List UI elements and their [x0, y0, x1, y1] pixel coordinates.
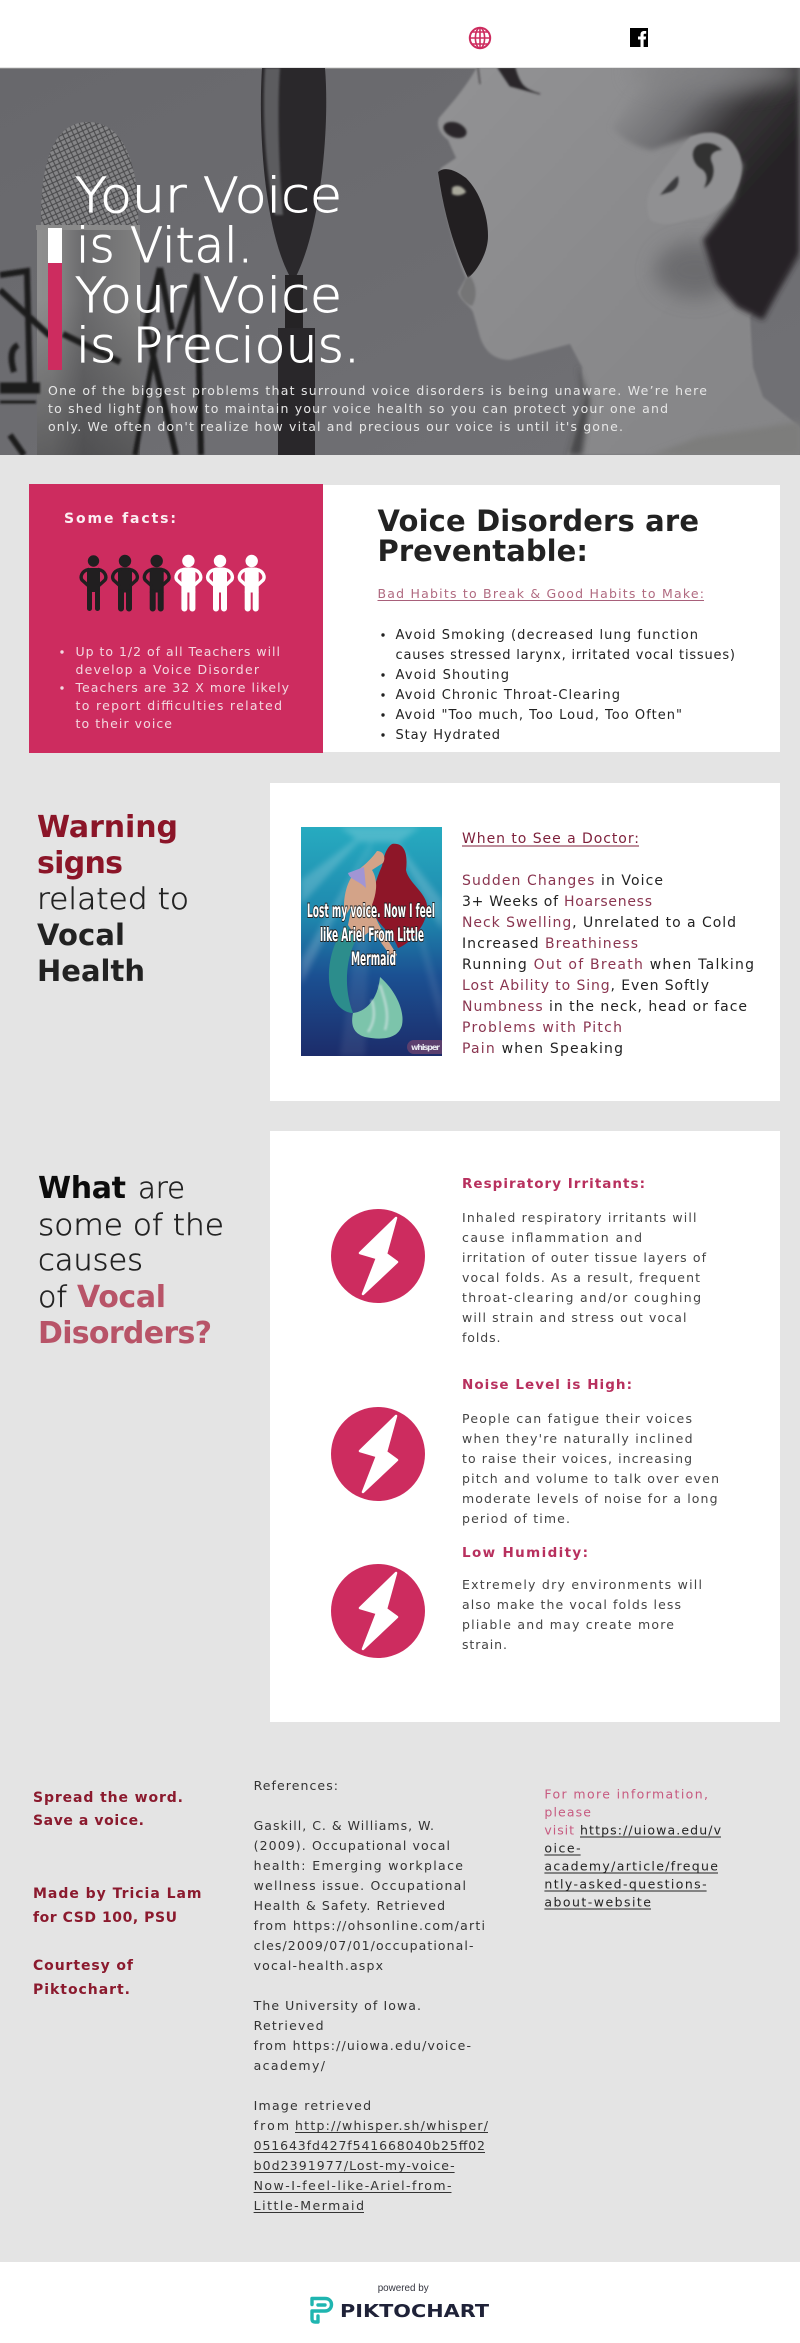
warning signs list: Pain when Speaking: [462, 1041, 623, 1057]
whisper badge: [407, 1040, 442, 1054]
meme caption: Mermaid: [351, 948, 396, 970]
footer: references: b0d2391977/Lost-my-voice-: [254, 2158, 455, 2173]
heading: warning signs: signs: [37, 846, 123, 881]
footer: more information: oice-: [544, 1840, 581, 1856]
facts list: Up to 1/2 of all Teachers will: [76, 644, 280, 659]
cause: noise level: period of time.: [462, 1511, 570, 1526]
photo: singer's head: [438, 52, 800, 455]
icon: facebook: [630, 28, 648, 47]
top navigation bar: [0, 0, 800, 67]
heading: what are some of the causes: What: [38, 1171, 126, 1206]
heading: warning signs: related to: [37, 882, 189, 916]
icon: lightning bolt 1: [331, 1209, 425, 1303]
heading: warning signs: Warning: [37, 810, 178, 845]
hero intro text: One of the biggest problems that surround voice disorders is being unaware. We’re here: [48, 383, 707, 398]
footer: powered by Piktochart: [0, 2262, 800, 2343]
footer: more information: [544, 1786, 722, 1910]
warning signs list: [462, 873, 754, 1057]
footer: credits: Made by Tricia Lam: [33, 1886, 202, 1902]
subheading: bad habits: Bad Habits to Break & Good Habits to Make:: [378, 586, 704, 601]
habits list: Stay Hydrated: [396, 728, 500, 743]
photo: microphone: [0, 122, 201, 455]
hero intro text: to shed light on how to maintain your voice health so you can protect your one and: [48, 401, 668, 416]
hero title: [75, 175, 354, 364]
warning signs list: Problems with Pitch: [462, 1020, 622, 1036]
cause: respiratory irritants: Respiratory Irritants:: [462, 1176, 645, 1192]
cause: noise level: when they're naturally inclined: [462, 1431, 692, 1446]
footer: references: http://whisper.sh/whisper/: [295, 2118, 489, 2133]
habits list: Avoid Chronic Throat-Clearing: [396, 688, 620, 703]
facts list: to report difficulties related: [76, 698, 282, 713]
footer: credits: for CSD 100, PSU: [33, 1910, 177, 1926]
cause: respiratory irritants: vocal folds. As a result, frequent: [462, 1270, 700, 1285]
heading: what are some of the causes: some of the: [38, 1208, 224, 1242]
meme caption: like Ariel From Little: [320, 924, 424, 946]
hero banner: [0, 52, 800, 455]
Piktochart wordmark: PIKTOCHART: [340, 2301, 490, 2322]
footer: more information: ntly-asked-questions-: [544, 1876, 707, 1892]
cause: low humidity: Extremely dry environments will: [462, 1577, 702, 1592]
footer: more information: https://uiowa.edu/v: [580, 1822, 722, 1838]
cause: noise level: [462, 1377, 719, 1526]
hero title: Your Voice: [75, 168, 342, 224]
footer: more information: please: [544, 1804, 591, 1820]
cause: low humidity: Low Humidity:: [462, 1545, 588, 1561]
icon: Piktochart logo: [312, 2298, 332, 2322]
habits list: causes stressed larynx, irritated vocal tissues): [396, 648, 735, 663]
cause: respiratory irritants: will strain and stress out vocal: [462, 1310, 686, 1325]
panel: some facts: [29, 484, 323, 753]
habits list: Avoid "Too much, Too Loud, Too Often": [396, 708, 682, 723]
cause: noise level: moderate levels of noise for a long: [462, 1491, 718, 1506]
heading: warning signs: [37, 810, 189, 988]
warning signs list: Increased Breathiness: [462, 936, 638, 952]
footer: credits: Piktochart.: [33, 1982, 130, 1998]
footer: references: Health & Safety. Retrieved: [254, 1898, 445, 1913]
footer: references: Retrieved: [254, 2018, 324, 2033]
accent bar: [48, 228, 62, 370]
heading: voice disorders are preventable: Preventable:: [378, 534, 588, 568]
hero intro text: only. We often don't realize how vital and precious our voice is until it's gone.: [48, 419, 623, 434]
cause: low humidity: strain.: [462, 1637, 507, 1652]
cause: low humidity: [462, 1545, 702, 1652]
facts list: develop a Voice Disorder: [76, 662, 260, 677]
icon row: six people, three highlighted: [81, 555, 264, 611]
footer: references: Now-I-feel-like-Ariel-from-: [254, 2178, 452, 2193]
cause: noise level: to raise their voices, increasing: [462, 1451, 692, 1466]
heading: what are some of the causes: Disorders?: [38, 1316, 212, 1351]
cause: respiratory irritants: throat-clearing and/or coughing: [462, 1290, 701, 1305]
footer: references: academy/: [254, 2058, 326, 2073]
footer: references: (2009). Occupational vocal: [254, 1838, 450, 1853]
footer: references: 051643fd427f541668040b25ff02: [254, 2138, 485, 2153]
footer: references: Gaskill, C. & Williams, W.: [254, 1818, 434, 1833]
footer: credits: Save a voice.: [33, 1813, 144, 1829]
cause: noise level: Noise Level is High:: [462, 1377, 632, 1393]
cause: low humidity: also make the vocal folds less: [462, 1597, 681, 1612]
footer: references: from: [254, 2118, 289, 2133]
image: Ariel whisper meme: [301, 827, 447, 1056]
cause: respiratory irritants: irritation of outer tissue layers of: [462, 1250, 707, 1265]
footer: references: The University of Iowa.: [253, 1998, 421, 2013]
heading: voice disorders are preventable: Voice Disorders are: [378, 504, 699, 538]
cause: respiratory irritants: [462, 1176, 707, 1345]
habits list: Avoid Shouting: [396, 668, 509, 683]
hero background: [0, 68, 800, 455]
footer: credits: [33, 1790, 202, 1998]
heading: warning signs: Vocal: [37, 918, 125, 952]
hero title: is Precious.: [76, 318, 360, 374]
heading: what are some of the causes: Vocal: [77, 1280, 166, 1315]
cause: respiratory irritants: folds.: [462, 1330, 500, 1345]
panel: when to see a doctor: [270, 783, 780, 1101]
heading: what are some of the causes: causes: [38, 1243, 143, 1277]
heading: what are some of the causes: of: [38, 1280, 68, 1314]
icon: globe: [470, 28, 490, 48]
whisper badge: whisper: [411, 1043, 440, 1052]
facts list: to their voice: [76, 716, 172, 731]
cause: respiratory irritants: Inhaled respiratory irritants will: [462, 1210, 696, 1225]
heading: voice disorders are preventable: [378, 504, 699, 568]
habits list: [381, 628, 735, 743]
panel: preventable habits: [323, 485, 780, 752]
warning signs list: Running Out of Breath when Talking: [462, 957, 754, 973]
cause: respiratory irritants: cause inflammation and: [462, 1230, 642, 1245]
warning signs list: Neck Swelling, Unrelated to a Cold: [462, 915, 736, 931]
facts list: Teachers are 32 X more likely: [74, 680, 290, 695]
footer: more information: academy/article/freque: [544, 1858, 718, 1874]
footer: references: cles/2009/07/01/occupational-: [254, 1938, 474, 1953]
footer: references: [253, 1778, 489, 2213]
footer: more information: For more information,: [544, 1786, 708, 1802]
footer: references: vocal-health.aspx: [254, 1958, 383, 1973]
panel: causes: [270, 1131, 780, 1722]
footer: references: wellness issue. Occupational: [254, 1878, 466, 1893]
heading: warning signs: Health: [37, 954, 145, 988]
heading: some facts: Some facts:: [64, 511, 176, 527]
warning signs list: Numbness in the neck, head or face: [462, 999, 747, 1015]
doctor subheading: When to See a Doctor:: [462, 831, 639, 847]
heading: what are some of the causes: [38, 1171, 224, 1351]
icon: lightning bolt 2: [331, 1407, 425, 1501]
heading: what are some of the causes: are: [138, 1171, 185, 1205]
footer: references: Little-Mermaid: [254, 2198, 364, 2213]
habits list: Avoid Smoking (decreased lung function: [396, 628, 698, 643]
powered by label: powered by: [378, 2282, 429, 2294]
footer: more information: about-website: [544, 1894, 651, 1910]
cause: low humidity: pliable and may create more: [462, 1617, 674, 1632]
warning signs list: Lost Ability to Sing, Even Softly: [462, 978, 709, 994]
image: Ariel whisper meme: Lost my voice. Now I feel: [307, 900, 435, 922]
footer: references: References:: [254, 1778, 338, 1793]
cause: noise level: People can fatigue their voices: [462, 1411, 692, 1426]
hero title: is Vital.: [76, 218, 253, 274]
footer: credits: Courtesy of: [33, 1958, 134, 1974]
hero intro text: [48, 383, 707, 434]
photo: pop filter: [261, 68, 326, 455]
footer: references: health: Emerging workplace: [254, 1858, 463, 1873]
hero title: Your Voice: [75, 268, 342, 324]
footer: references: Image retrieved: [254, 2098, 371, 2113]
meme caption: [307, 900, 435, 970]
warning signs list: Sudden Changes in Voice: [462, 873, 663, 889]
icon: lightning bolt 3: [331, 1564, 425, 1658]
footer: references: from https://ohsonline.com/arti: [254, 1918, 485, 1933]
facts list: [60, 644, 290, 731]
footer: credits: Spread the word.: [33, 1790, 183, 1806]
footer: more information: visit: [544, 1822, 574, 1838]
cause: noise level: pitch and volume to talk over even: [462, 1471, 719, 1486]
footer: references: from https://uiowa.edu/voice-: [254, 2038, 471, 2053]
warning signs list: 3+ Weeks of Hoarseness: [462, 894, 652, 910]
